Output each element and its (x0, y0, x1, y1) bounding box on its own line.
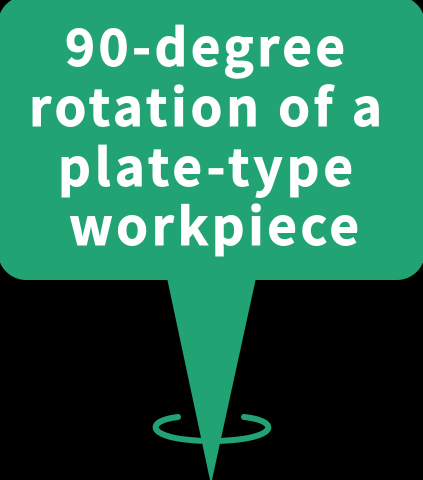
heading: title text (29, 7, 382, 260)
heading: title text: workpiece (69, 186, 359, 260)
heading: title text: 90-degree (65, 7, 345, 81)
heading: title text: rotation of a (29, 67, 382, 141)
icon: pointer spike (167, 278, 256, 480)
heading: title text: plate-type (58, 127, 353, 201)
panel: green speech bubble (0, 0, 423, 280)
icon: rotation arrow ring (156, 417, 268, 441)
